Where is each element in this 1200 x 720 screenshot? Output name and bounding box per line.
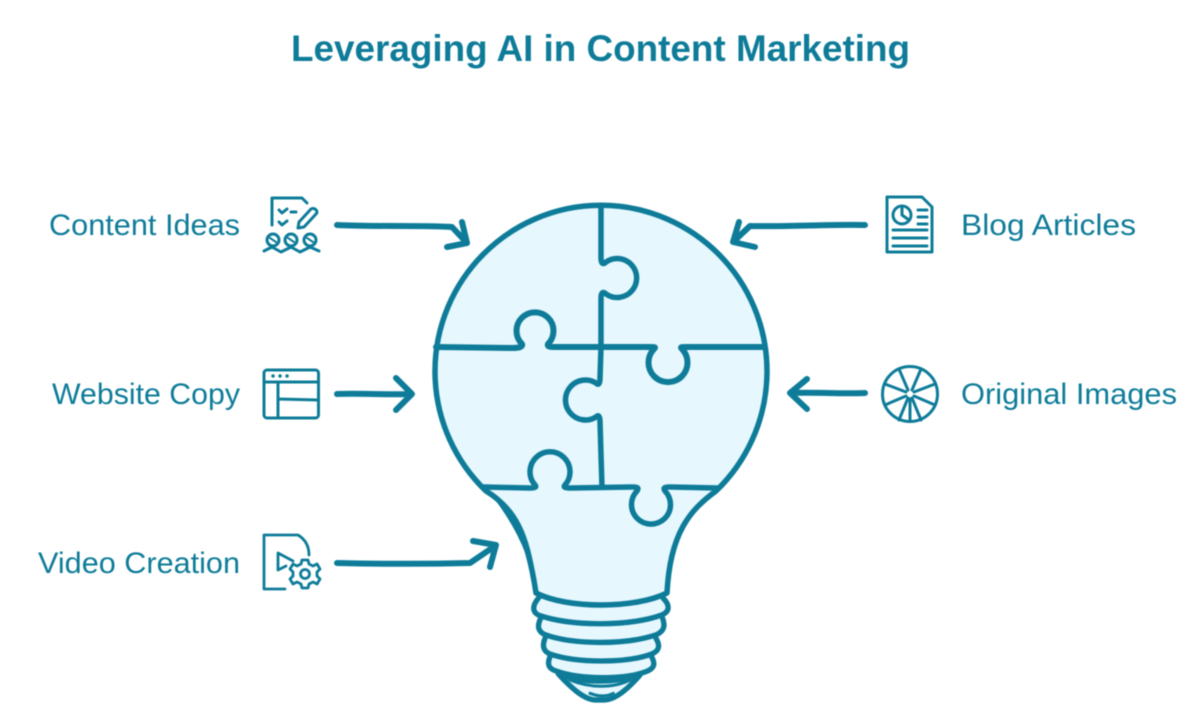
icon: browser window xyxy=(264,370,318,418)
left item: Content Ideas xyxy=(49,198,467,252)
icon: document with pie chart xyxy=(887,197,932,252)
left item: Website Copy xyxy=(52,370,412,418)
left item: Video Creation xyxy=(38,535,496,589)
arrow xyxy=(337,378,412,410)
icon: checklist and team xyxy=(264,198,319,252)
label: Original Images xyxy=(961,378,1177,411)
screw base threads xyxy=(534,598,668,700)
icon: aperture wheel xyxy=(882,366,938,422)
arrow xyxy=(337,222,467,247)
light bulb made of puzzle pieces xyxy=(435,205,767,700)
label: Video Creation xyxy=(38,547,240,580)
icon: video file and gear xyxy=(264,535,320,589)
label: Blog Articles xyxy=(961,209,1136,242)
bulb body xyxy=(435,205,767,605)
right item: Blog Articles xyxy=(733,197,1136,252)
arrow xyxy=(790,379,865,409)
thicker neck stroke xyxy=(492,494,535,580)
arrow xyxy=(337,541,496,567)
right item: Original Images xyxy=(790,366,1177,422)
label: Content Ideas xyxy=(49,209,240,242)
arrow xyxy=(733,222,865,247)
puzzle seams xyxy=(565,206,637,487)
label: Website Copy xyxy=(52,378,240,411)
title: Leveraging AI in Content Marketing xyxy=(291,28,910,69)
